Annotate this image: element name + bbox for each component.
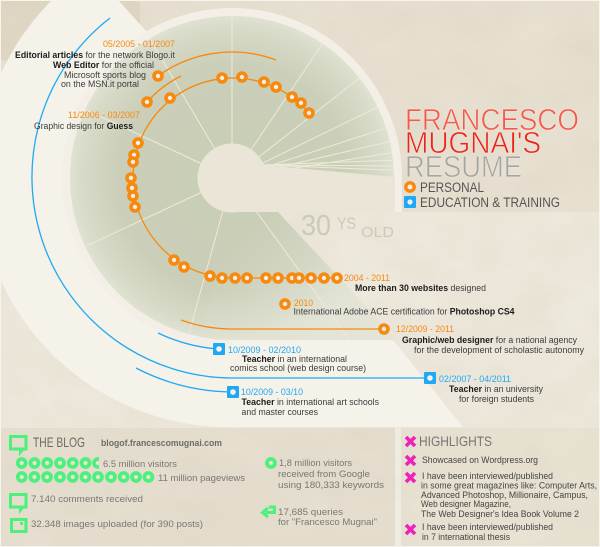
text: teacher art schools: and master courses: [242, 407, 318, 417]
wheel hub: [198, 144, 266, 212]
highlight: thesis: in 7 international thesis: [422, 532, 510, 542]
images text: 32.348 images uploaded (for 390 posts): [31, 519, 203, 530]
text: teacher university: Teacher in an university: [449, 384, 543, 394]
wheel: green sector: [70, 16, 397, 340]
text: graphic design for Guess: 11/2006 - 03/2007: [68, 110, 140, 120]
icon: cross 2: [406, 473, 415, 482]
comments text: 7.140 comments received: [31, 494, 143, 505]
google text: 1,8 million visitors: [279, 458, 352, 469]
timeline arc: blue short teacher comics: [158, 333, 218, 349]
highlight: magazines: Advanced Photoshop, Millionaire, Campus,: [421, 490, 588, 500]
icon: heading cross: [406, 437, 415, 446]
text: teacher art schools: [241, 387, 379, 417]
google text: using 180,333 keywords: [278, 480, 384, 491]
blue marker: comics school: [213, 343, 225, 355]
wheel: white rim: [62, 8, 402, 348]
text: editorial articles: Editorial articles for the network Blogo.it: [15, 50, 175, 60]
text: teacher art schools: Teacher in international art schools: [242, 397, 379, 407]
timeline arc: orange graphic designer: [181, 320, 384, 329]
orange website markers: [127, 73, 341, 282]
text: teacher university: 02/2007 - 04/2011: [439, 374, 511, 384]
text: websites: [344, 273, 486, 293]
icon: return arrow: [262, 507, 274, 517]
text: graphic web designer: 12/2009 - 2011: [396, 324, 454, 334]
blue marker: art schools: [227, 386, 239, 398]
text: ACE certification: International Adobe ACE certification for Photoshop CS4: [294, 306, 514, 316]
text: teacher comics: Teacher in an international: [242, 354, 347, 364]
icon: cross 3: [406, 525, 415, 534]
legend: personal: PERSONAL: [420, 180, 484, 195]
timeline arc: blue short teacher art schools: [136, 368, 233, 392]
orange job markers: [143, 72, 388, 333]
timeline arc: orange websites: [133, 78, 337, 278]
text: teacher art schools: 10/2009 - 03/10: [241, 387, 303, 397]
text: ACE certification: [294, 298, 514, 316]
text: editorial articles: 05/2005 - 01/2007: [103, 39, 175, 49]
highlight: magazines: The Web Designer's Idea Book Volume 2: [421, 509, 579, 519]
blog heading: THE BLOG: [33, 434, 85, 450]
text: teacher comics: 10/2009 - 02/2010: [228, 345, 301, 355]
highlight: magazines: [421, 471, 597, 519]
title: RESUME: [405, 149, 522, 184]
queries text: [278, 507, 377, 528]
title: [405, 102, 579, 184]
text: graphic web designer: [396, 324, 584, 355]
blog url: blogof.francescomugnai.com: [101, 438, 222, 448]
text: editorial articles: [15, 39, 175, 89]
wheel spokes: [78, 8, 402, 342]
text: websites: 2004 - 2011: [344, 273, 390, 283]
highlight: thesis: I have been interviewed/published: [422, 522, 553, 532]
visitors dots: [18, 459, 102, 467]
google dot: [267, 459, 275, 467]
queries text: 17,685 queries: [278, 507, 343, 518]
text: graphic web designer: for the development of scholastic autonomy: [414, 345, 584, 355]
google text: [278, 458, 384, 491]
pageviews text: 11 million pageviews: [158, 473, 245, 484]
pageviews dots: [18, 473, 152, 481]
age label: OLD: [361, 224, 394, 241]
icon: speech bubble: [10, 436, 26, 452]
text: teacher university: [439, 374, 543, 404]
legend: education and training: EDUCATION & TRAINING: [420, 195, 560, 210]
text: editorial articles: Web Editor for the official: [53, 60, 154, 70]
age label: 30: [301, 210, 331, 242]
text: graphic design for Guess: Graphic design for Guess: [34, 121, 133, 131]
timeline arc: orange guess: [147, 76, 181, 102]
timeline arc: blue long arc: [32, 18, 424, 378]
band right of hub: [232, 165, 395, 212]
cream fan behind the wheel: [0, 0, 463, 427]
highlight: magazines: Web designer Magazine,: [421, 499, 511, 509]
icon: comments bubble: [10, 494, 26, 510]
visitors text: 6.5 million visitors: [103, 459, 177, 470]
text: editorial articles: on the MSN.it portal: [61, 79, 139, 89]
text: websites: More than 30 websites designed: [355, 283, 486, 293]
title: FRANCESCO: [405, 102, 579, 137]
icon: cross 1: [406, 456, 415, 465]
blue marker: university: [424, 372, 436, 384]
text: teacher university: for foreign students: [459, 394, 534, 404]
timeline arc: orange editorial: [158, 52, 276, 76]
highlight: wordpress: Showcased on Wordpress.org: [422, 455, 538, 465]
text: teacher comics: [228, 345, 366, 373]
queries text: for "Francesco Mugnai": [278, 517, 377, 528]
panel: highlights: [406, 434, 597, 542]
title: MUGNAI'S: [405, 125, 541, 160]
highlight: magazines: I have been interviewed/published: [422, 471, 553, 481]
icon: image: [12, 520, 26, 532]
text: teacher comics: comics school (web design course): [230, 363, 366, 373]
highlight: magazines: in some great magazines like: Computer Arts,: [421, 480, 597, 490]
highlights heading: HIGHLIGHTS: [419, 434, 492, 449]
text: editorial articles: Microsoft sports blog: [64, 70, 146, 80]
age label: YS: [337, 214, 356, 233]
highlight: thesis: [422, 522, 553, 542]
panel: the blog: [10, 434, 384, 532]
text: graphic web designer: Graphic/web designer for a national agency: [402, 335, 577, 345]
legend: [404, 180, 560, 210]
text: graphic design for Guess: [34, 110, 140, 131]
age label: [301, 210, 394, 242]
google text: received from Google: [278, 469, 370, 480]
text: ACE certification: 2010: [294, 298, 313, 308]
